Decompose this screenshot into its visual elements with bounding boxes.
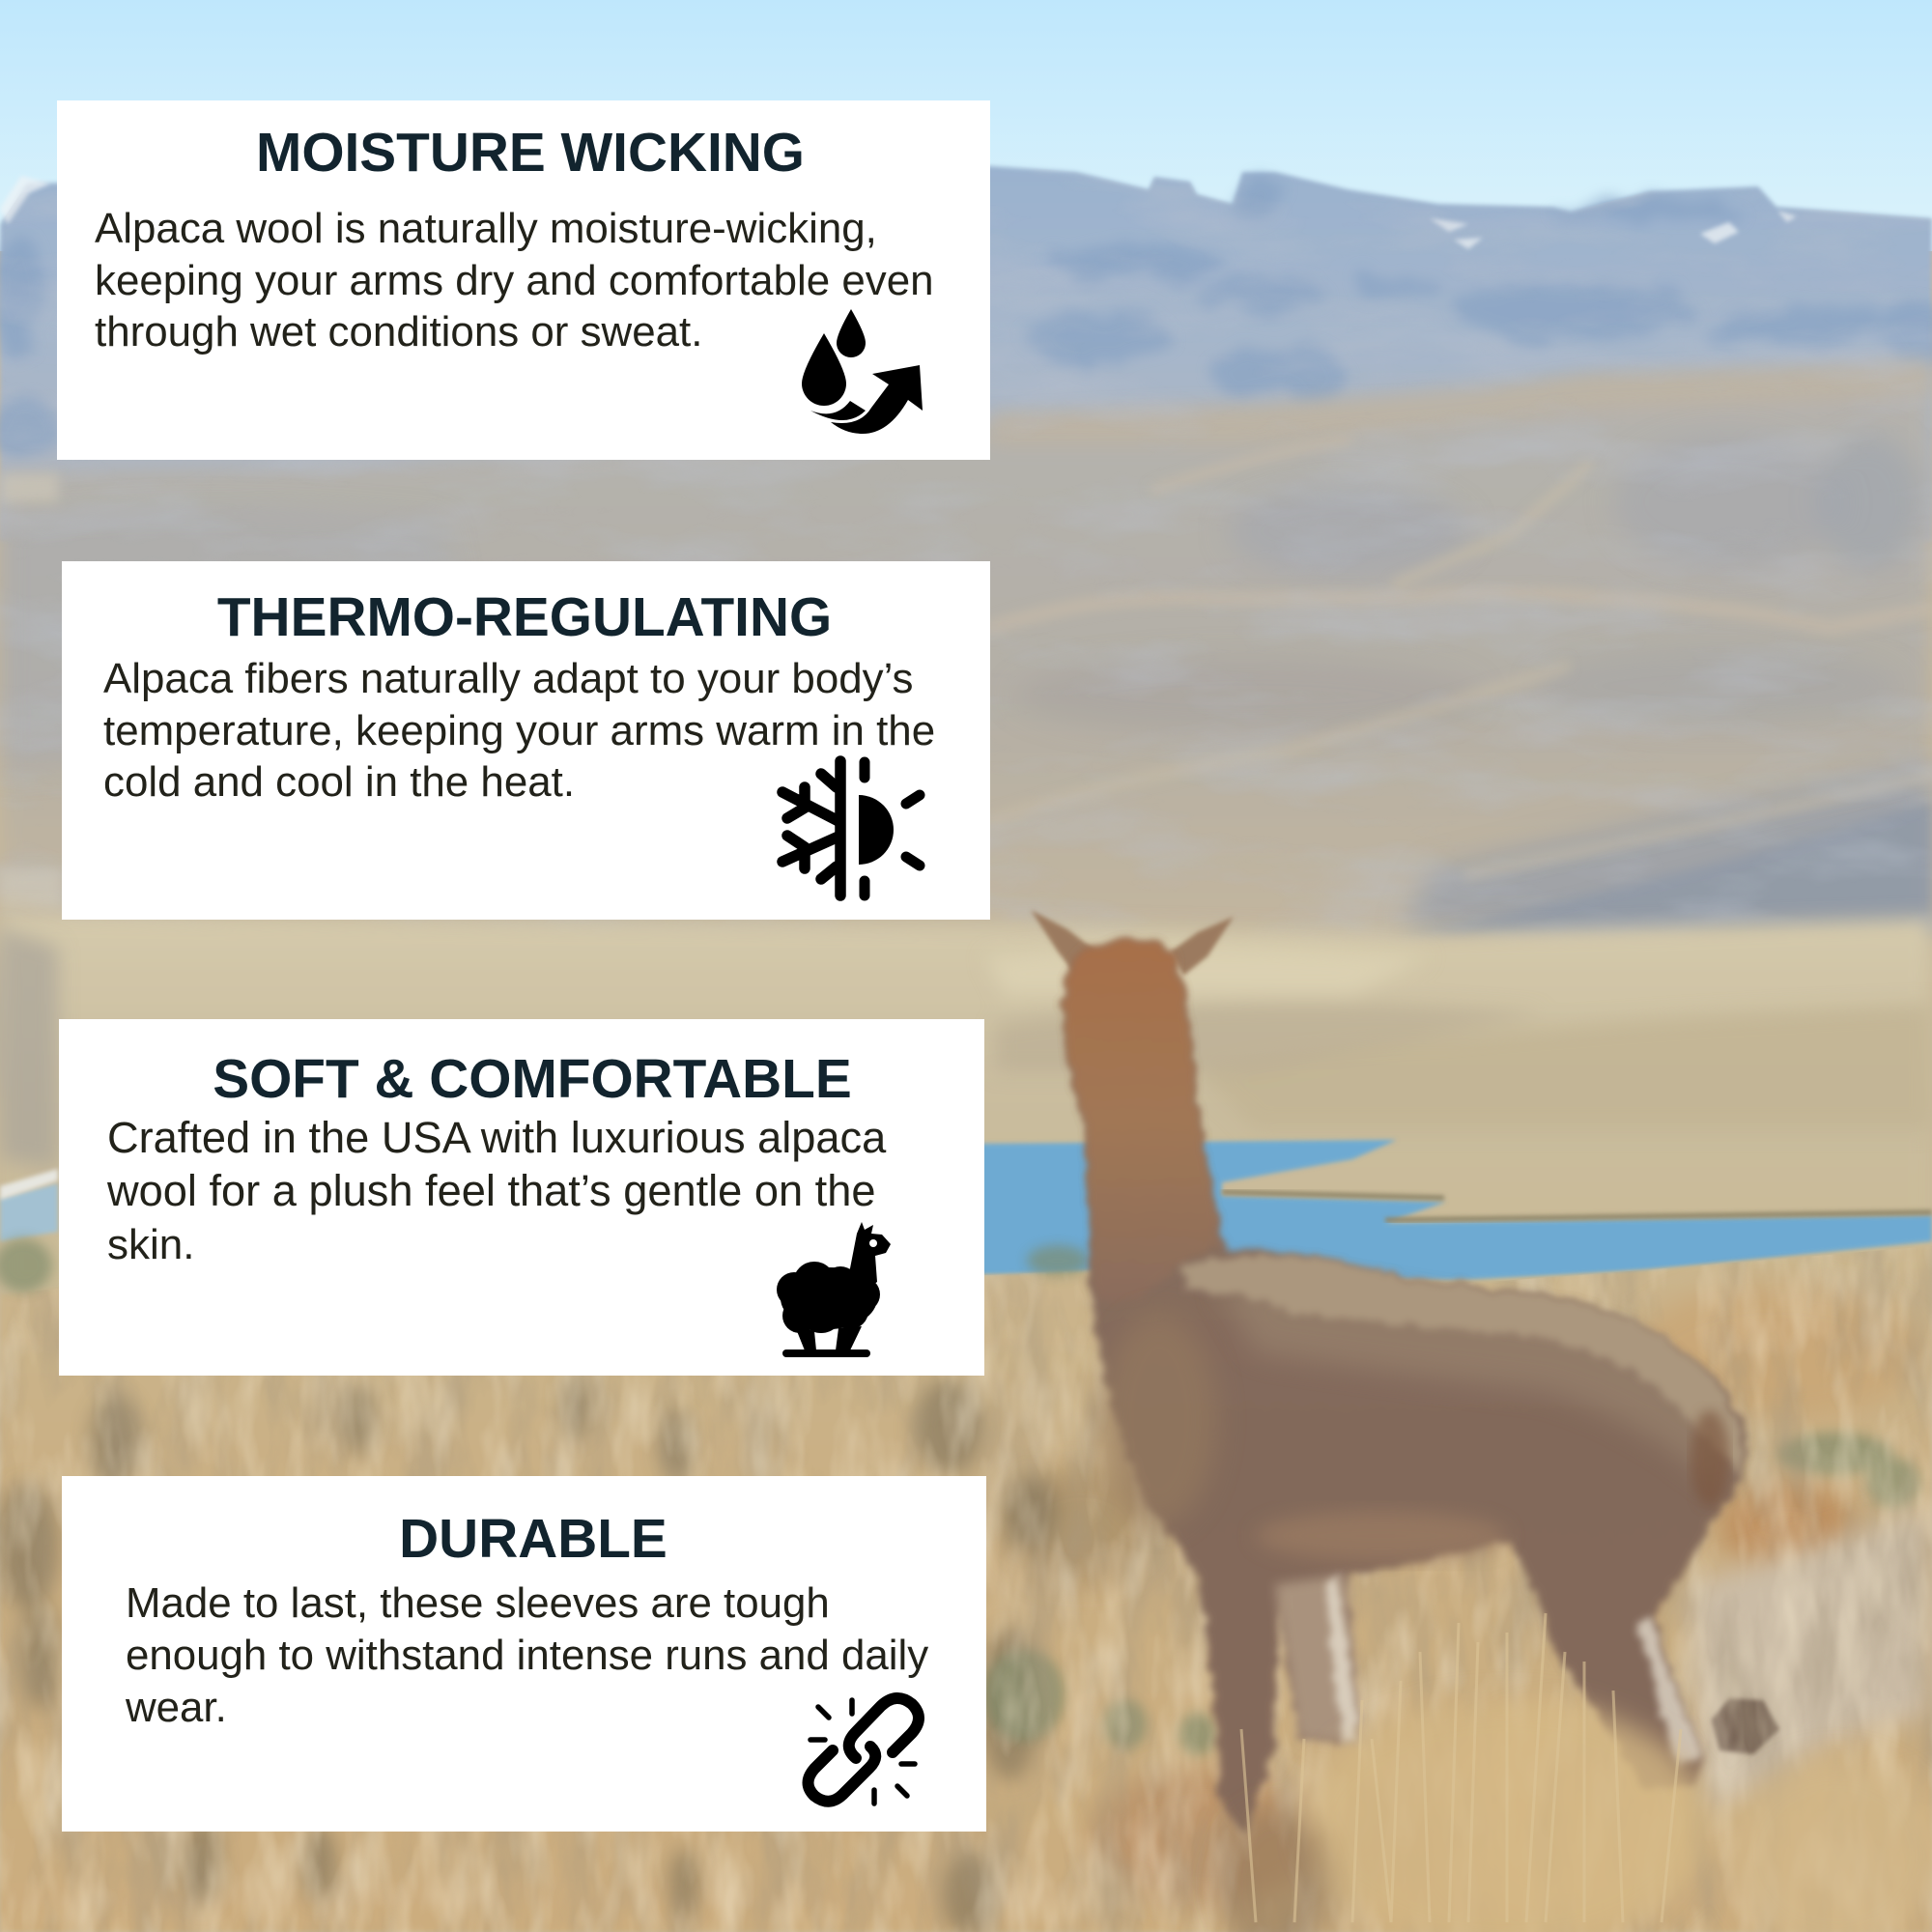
alpaca belly tone [1256, 1511, 1507, 1561]
panel background [59, 1019, 984, 1376]
heading: THERMO-REGULATING [217, 587, 832, 648]
sky [0, 0, 1932, 251]
foreground grass clumps [1217, 1700, 1932, 1932]
lake left strip [0, 1183, 58, 1241]
body text: through wet conditions or sweat. [95, 308, 702, 355]
lake [980, 1140, 1932, 1280]
grass texture dark [0, 1246, 1932, 1932]
tan ridge lines and tracks [991, 440, 1932, 874]
alpaca ears [1031, 910, 1234, 980]
dark grass tufts [0, 1370, 1057, 1932]
icon: broken chain link [808, 1698, 919, 1804]
heading: MOISTURE WICKING [256, 123, 805, 184]
heading: SOFT & COMFORTABLE [213, 1049, 852, 1110]
body text: keeping your arms dry and comfortable even [95, 257, 934, 304]
panel background [57, 100, 990, 460]
valley floor [0, 913, 1932, 1294]
tan band along ridge [991, 359, 1932, 444]
rolling hills [0, 365, 1932, 966]
body text [125, 1579, 928, 1731]
panel: moisture wicking [57, 100, 990, 460]
green shrubs [0, 1238, 1920, 1755]
panel: thermo-regulating [62, 561, 990, 920]
alpaca silhouette [1065, 938, 1746, 1835]
grass texture [0, 1246, 1932, 1932]
body text: cold and cool in the heat. [103, 758, 575, 806]
rocks [1712, 1698, 1779, 1754]
body text: wool for a plush feel that’s gentle on the [106, 1166, 876, 1215]
panel: durable [62, 1476, 986, 1832]
dark ridge foreground hill [1391, 802, 1932, 937]
body text: wear. [125, 1684, 227, 1731]
left side highlights [0, 473, 62, 908]
land texture [0, 164, 1932, 947]
body text: Made to last, these sleeves are tough [126, 1579, 830, 1627]
alpaca back wool mid tone [1217, 1282, 1729, 1488]
grass texture light [0, 1246, 1932, 1932]
body text [95, 205, 934, 355]
body text: enough to withstand intense runs and daily [126, 1632, 928, 1679]
alpaca neck and head [1065, 938, 1219, 1303]
alpaca chest tone [1101, 1314, 1217, 1526]
alpaca [1031, 910, 1746, 1835]
snow patches [0, 176, 1797, 249]
body text [106, 1113, 887, 1268]
white shore streak [0, 1169, 58, 1200]
body text: skin. [107, 1221, 194, 1268]
land noise [0, 164, 1932, 947]
panel background [62, 1476, 986, 1832]
sun rays [865, 762, 920, 895]
body text: temperature, keeping your arms warm in the [103, 707, 935, 754]
panel: soft and comfortable [59, 1019, 984, 1376]
icon: snowflake and sun [782, 761, 920, 895]
dirt path [1687, 1507, 1932, 1816]
icon: water drops with arrow [802, 309, 923, 434]
valley hill bands [0, 927, 1932, 1169]
mountain shadow patches [0, 181, 1932, 455]
hill shadows [0, 435, 1932, 1111]
lake spit shadow line [1222, 1192, 1932, 1220]
body text [103, 655, 935, 806]
heading: DURABLE [399, 1509, 668, 1570]
body text: Alpaca fibers naturally adapt to your body’s [103, 655, 914, 702]
sun half [859, 795, 894, 865]
alpaca back wool [1183, 1256, 1743, 1478]
foreground grass strands [1241, 1613, 1681, 1922]
body text: Alpaca wool is naturally moisture-wicking, [95, 205, 877, 252]
grass field [0, 1246, 1932, 1932]
body text: Crafted in the USA with luxurious alpaca [107, 1113, 887, 1162]
alpaca leg highlights [1325, 1575, 1705, 1768]
alpaca rump shadow [1690, 1410, 1729, 1507]
grass light and dark masses [1005, 1285, 1922, 1922]
icon: alpaca silhouette [777, 1222, 891, 1357]
panel background [62, 561, 990, 920]
snowflake half [782, 761, 840, 895]
alpaca lower leg wash [1275, 1575, 1360, 1744]
distant mountains [0, 166, 1932, 541]
